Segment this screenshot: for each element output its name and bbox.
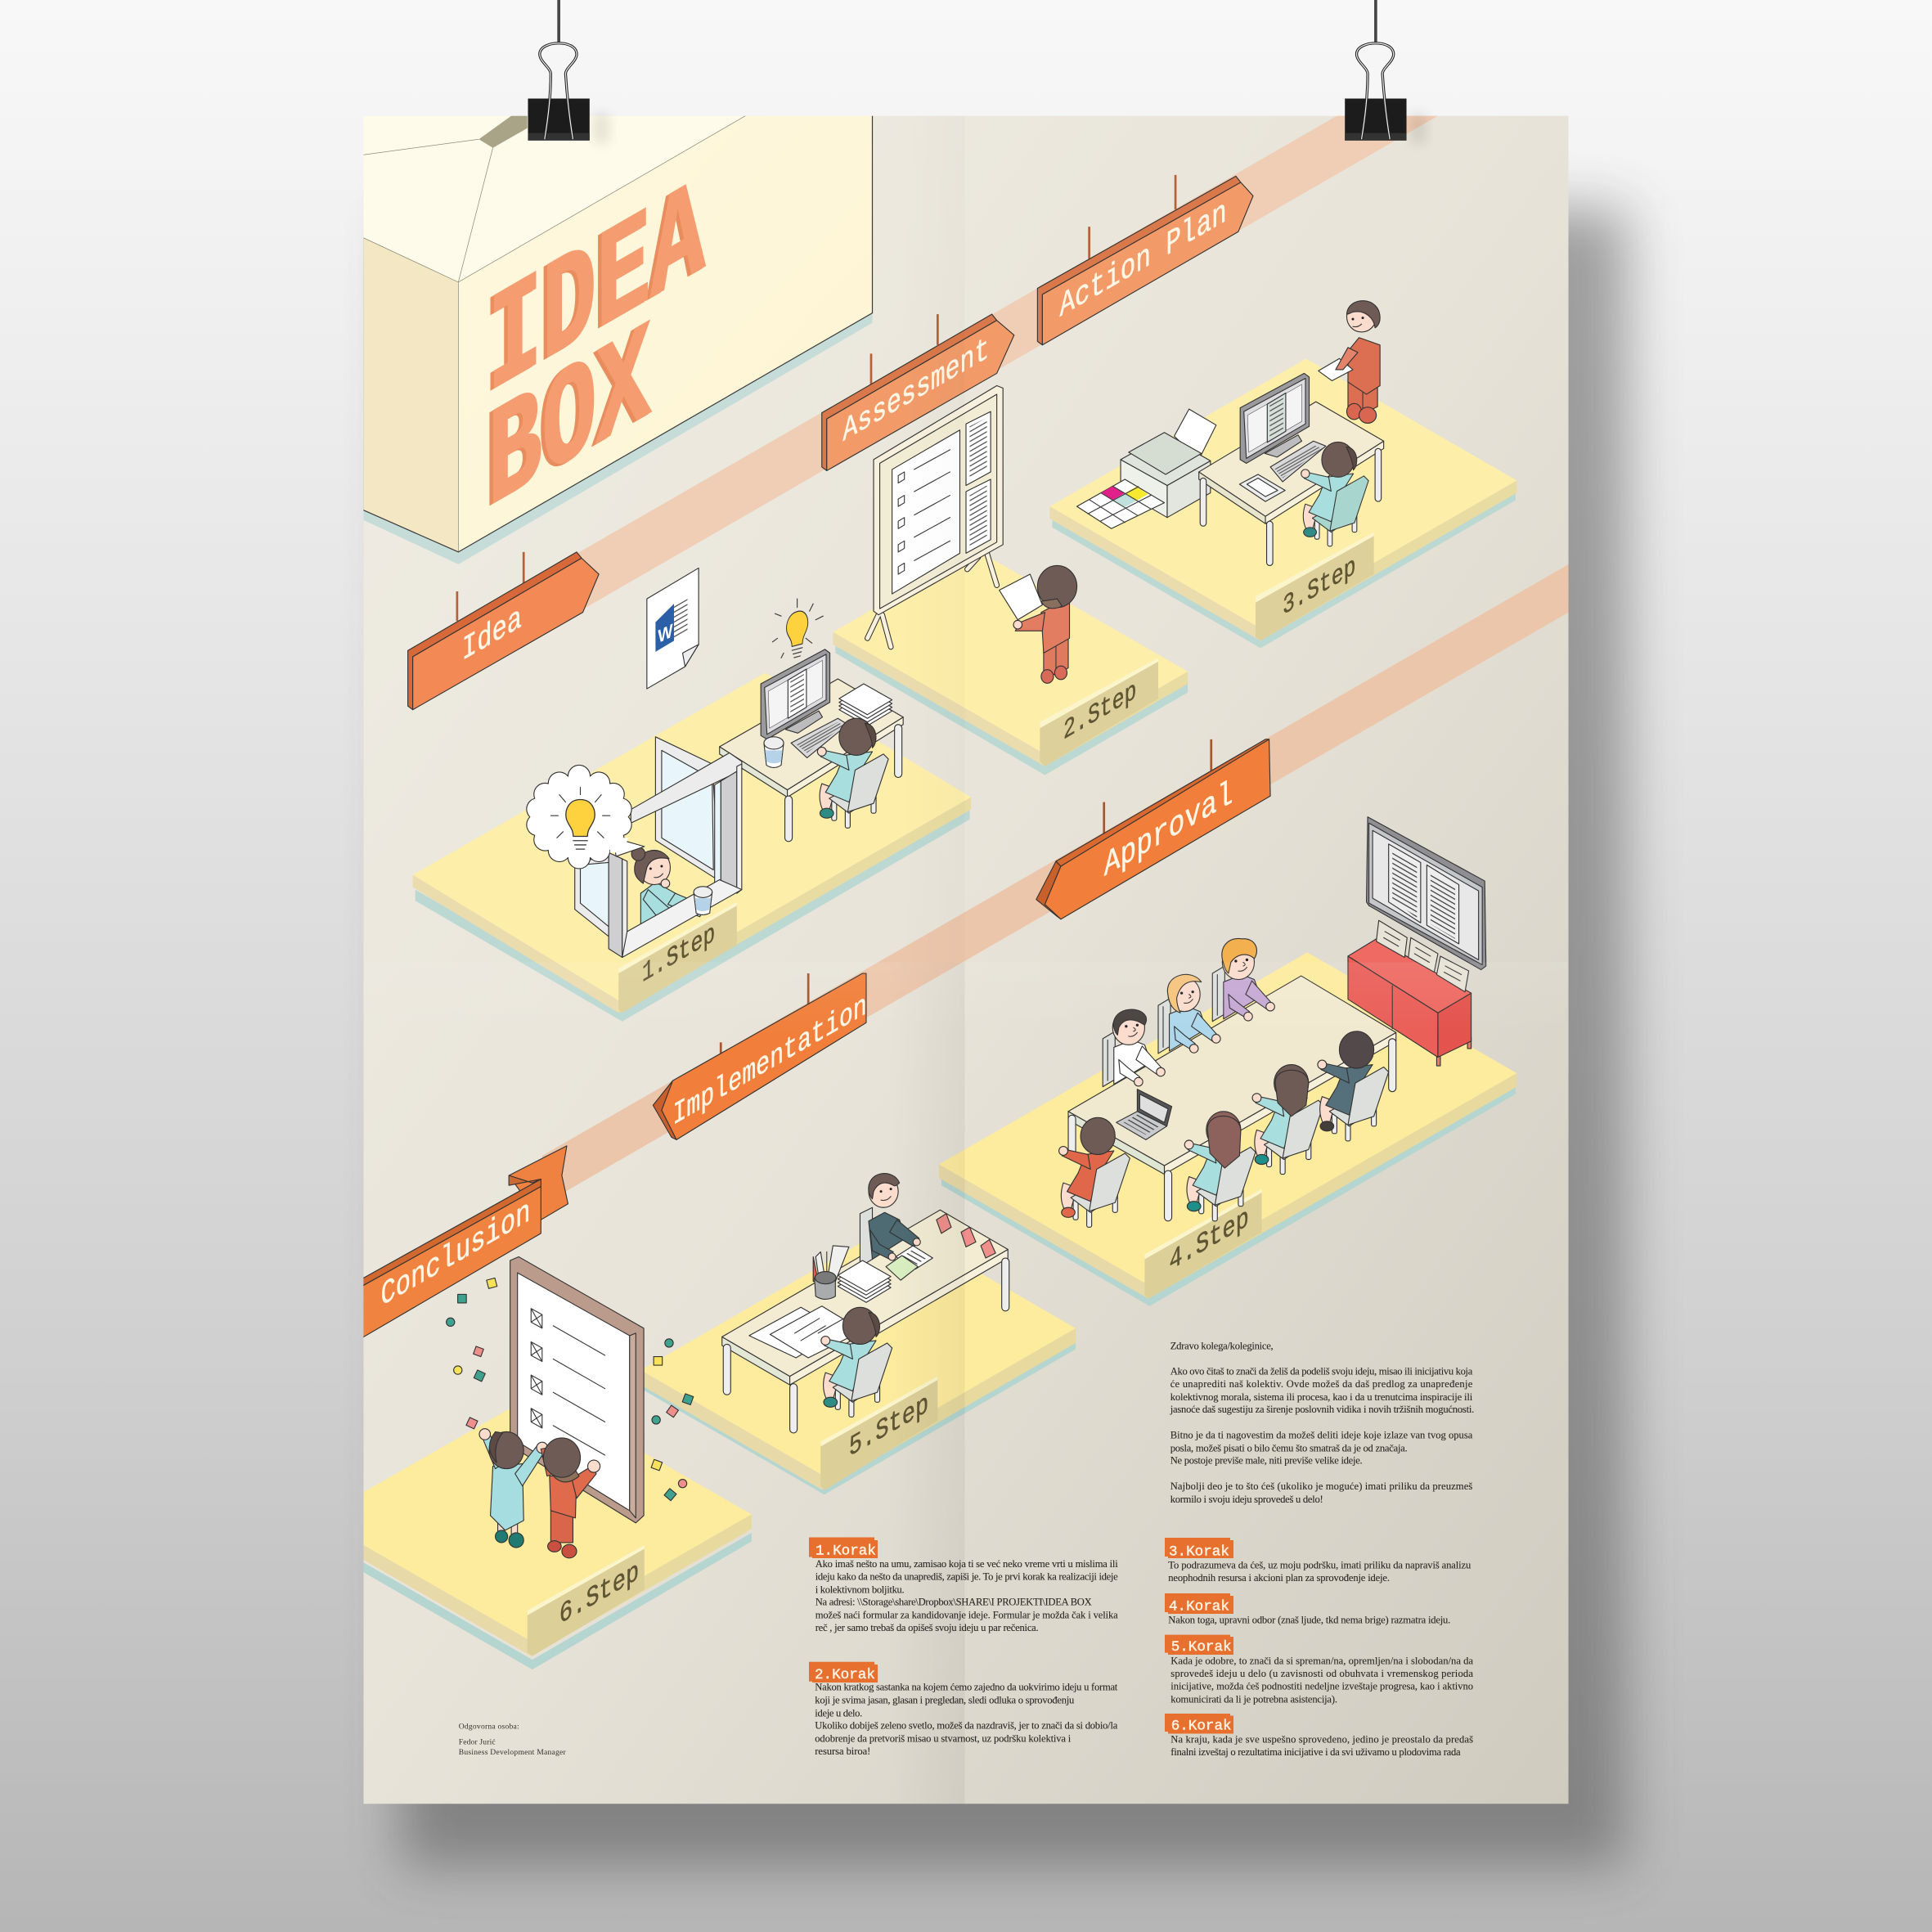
- checklist board: [510, 1257, 644, 1523]
- text block: responsible person: [459, 1722, 566, 1757]
- fold shading: vertical lower: [887, 962, 964, 1804]
- printed colour sheet: [1077, 479, 1165, 528]
- speech bubble with bulb: [527, 765, 645, 869]
- person: man in white shirt: [1103, 1009, 1165, 1087]
- step tab 5: [820, 1379, 937, 1489]
- sign: Idea: [408, 552, 599, 710]
- step label 2: 2.Step: [1063, 675, 1136, 748]
- step tab 6: [528, 1548, 645, 1656]
- text block: step 1: reč , jer samo trebaš da opišeš svoju ideju u par rečenica.: [815, 1622, 1039, 1633]
- ribbon: Conclusion: Conclusion: [380, 1193, 530, 1317]
- platform 1: [413, 672, 971, 1022]
- seated worker 1: [817, 718, 888, 828]
- text block: greeting: Najbolji deo je to što ćeš (ukoliko je moguće) imati priliku da preuzmeš: [1170, 1480, 1472, 1492]
- label: 1.Korak: 1.Korak: [815, 1543, 876, 1560]
- road band: upper: [567, 116, 1438, 618]
- tablet: [1239, 474, 1285, 501]
- man at desk: [860, 1174, 920, 1267]
- scene 5: desk: [722, 1174, 1009, 1433]
- checklist: [892, 430, 959, 594]
- text block: step 5: inicijative, možda ćeš podnostiti nedeljne izveštaje progresa, kao i aktivno: [1170, 1681, 1473, 1692]
- woman at window: [631, 847, 705, 932]
- word document: [647, 568, 699, 689]
- sign: Approval: Approval: [1104, 774, 1233, 887]
- text block: step 1: ideju kako da nešto da unaprediš, zapiši je. To je prvi korak ka realizaciji ideje: [815, 1571, 1118, 1583]
- text block: responsible person: Odgovorna osoba:: [459, 1722, 519, 1731]
- binder clip right: [1345, 0, 1426, 143]
- label: 6.Korak: 6.Korak: [1171, 1719, 1232, 1735]
- platform 6: [363, 1392, 752, 1669]
- front frame: [631, 753, 742, 823]
- window: [575, 737, 742, 957]
- side notes: [966, 411, 991, 486]
- person: blonde woman: [1158, 974, 1220, 1054]
- text block: greeting: Bitno je da ti nagovestim da možeš deliti ideje koje izlaze van tvog opusa: [1170, 1430, 1473, 1441]
- cabinet frames: [1377, 920, 1407, 957]
- legs 1: [785, 796, 793, 842]
- text block: greeting: kolektivnog morala, sistema ili procesa, kao i da u trenutcima inspiracije ili: [1170, 1391, 1473, 1403]
- step label 5: 5.Step: [849, 1387, 928, 1465]
- woman at desk 5: [821, 1307, 892, 1417]
- paper stack: [839, 684, 892, 726]
- tent cards: [937, 1214, 995, 1258]
- keyboard 3: [1270, 441, 1326, 482]
- red cabinet: [1348, 920, 1471, 1066]
- text block: step 2: Nakon kratkog sastanka na kojem ćemo zajedno da uokvirimo ideju u format: [815, 1682, 1118, 1693]
- step label 4: 4.Step: [1170, 1202, 1249, 1279]
- text block: step 1: možeš naći formular za kandidovanje ideje. Formular je možda čak i velika: [815, 1609, 1118, 1620]
- fold shading: horizontal: [363, 962, 1569, 1036]
- word document: W: [658, 619, 673, 647]
- title: IDEA BOX: IDEA: [488, 150, 705, 432]
- text block: greeting: Ne postoje previše male, niti previše velike ideje.: [1170, 1455, 1363, 1467]
- cup on sill: [694, 887, 712, 914]
- text block: greeting: će unaprediti naš kolektiv. Ovde možeš da daš predlog za unapređenje: [1170, 1378, 1473, 1390]
- sign: Action Plan: [1037, 175, 1253, 345]
- binder clip left: [528, 0, 609, 143]
- person back: long hair: [1184, 1112, 1256, 1221]
- text block: step 2: [809, 1662, 1118, 1757]
- coffee cup: [764, 737, 784, 767]
- title: IDEA BOX: IDEA: [484, 152, 701, 434]
- text block: step 3: [1165, 1538, 1471, 1584]
- left leaf: [575, 856, 609, 937]
- step tab 3: [1256, 535, 1374, 640]
- ribbon: Conclusion: [357, 1146, 568, 1341]
- back leaf: [655, 737, 720, 881]
- sign: Idea: Idea: [462, 599, 522, 671]
- text block: greeting: jasnoće daš sugestiju za širenje poslovnih vidika i novih tržišnih mogućnosti.: [1170, 1404, 1474, 1415]
- text block: step 3: To podrazumeva da ćeš, uz moju podršku, imati priliku da napraviš analizu: [1168, 1559, 1471, 1570]
- person: curly hair: [1212, 938, 1274, 1022]
- sign: Approval: [1036, 739, 1270, 919]
- sign: Implementation: Implementation: [672, 987, 867, 1134]
- scene 2: planning board: [867, 385, 1077, 683]
- label: 2.Korak: [809, 1662, 878, 1683]
- easel legs: [867, 553, 997, 647]
- text block: greeting: [1170, 1340, 1474, 1505]
- label: 6.Korak: [1165, 1714, 1233, 1735]
- text block: step 3: neophodnih resursa i akcioni plan za sprovođenje ideje.: [1168, 1572, 1390, 1584]
- board frame: [874, 385, 1003, 615]
- text block: greeting: kormilo i svoju ideju sprovedeš u delo!: [1170, 1494, 1323, 1505]
- scene 1: window and desk: [527, 599, 903, 957]
- pen cup: [813, 1246, 849, 1299]
- text block: responsible person: Fedor Jurić: [459, 1737, 496, 1746]
- desk 3: [1199, 472, 1265, 523]
- seated worker 3: [1301, 442, 1368, 546]
- step tab 1: [618, 905, 737, 1013]
- person: red man: [541, 1438, 600, 1558]
- box shadow: [363, 313, 873, 564]
- poster drop shadow: [401, 209, 1626, 1867]
- text block: step 2: ideje u delo.: [815, 1707, 862, 1719]
- text block: step 2: koji je svima jasan, glasan i pregledan, sledi odluka o sprovođenju: [815, 1694, 1075, 1705]
- table: [1068, 1112, 1165, 1175]
- label: 2.Korak: 2.Korak: [815, 1667, 875, 1683]
- label: 5.Korak: [1165, 1635, 1233, 1656]
- title: IDEA BOX: [489, 184, 707, 505]
- laptop: [1117, 1090, 1172, 1139]
- platform 5: [640, 1224, 1076, 1494]
- text block: step 4: [1165, 1593, 1450, 1625]
- monitor 1: [761, 649, 830, 739]
- title: IDEA BOX: BOX: [488, 296, 651, 546]
- text block: greeting: Zdravo kolega/koleginice,: [1170, 1340, 1274, 1351]
- text block: step 1: [809, 1538, 1118, 1633]
- label: 3.Korak: 3.Korak: [1169, 1543, 1229, 1560]
- printer: [1077, 409, 1216, 528]
- person reading: [1000, 565, 1077, 683]
- poster: [357, 116, 1569, 1804]
- sign: Action Plan: Action Plan: [1059, 192, 1227, 327]
- label: 4.Korak: [1165, 1593, 1233, 1615]
- text block: responsible person: Business Development Manager: [459, 1748, 566, 1757]
- idea bulb: [772, 599, 823, 659]
- text block: step 5: [1165, 1635, 1473, 1705]
- scene 4: meeting room: [1059, 817, 1486, 1227]
- fold shading: vertical upper: [900, 116, 964, 962]
- person back: dark: [1318, 1031, 1389, 1141]
- text block: step 2: Ukoliko dobiješ zeleno svetlo, možeš da nazdraviš, jer to znači da si dobio/la: [815, 1720, 1118, 1732]
- step label 3: 3.Step: [1283, 550, 1356, 623]
- text block: step 2: odobrenje da pretvoriš misao u stvarnost, uz podršku kolektiva i: [815, 1732, 1072, 1744]
- label: 1.Korak: [809, 1538, 878, 1560]
- monitor 3: [1240, 373, 1310, 463]
- confetti: [447, 1278, 694, 1501]
- step tab 2: [1040, 660, 1158, 766]
- book and note: [886, 1246, 932, 1280]
- text block: step 4: Nakon toga, upravni odbor (znaš ljude, tkd nema brige) razmatra ideju.: [1168, 1614, 1450, 1625]
- standing man with clipboard: [1319, 301, 1380, 423]
- scene 6: finished checklist and people: [447, 1257, 694, 1558]
- person back: teal: [1252, 1065, 1323, 1175]
- person back: red: [1059, 1117, 1130, 1227]
- step label 1: 1.Step: [642, 918, 715, 991]
- documents: [749, 1307, 842, 1358]
- person: teal woman: [479, 1429, 548, 1548]
- desk 1: [720, 747, 788, 798]
- text block: step 1: Na adresi: \\Storage\share\Dropbox\SHARE\I PROJEKTI\IDEA BOX: [815, 1597, 1092, 1608]
- road band: lower: [542, 564, 1569, 1205]
- text block: step 5: sprovedeš ideju u delo (u zavisnosti od obuhvata i vremenskog perioda: [1170, 1668, 1473, 1679]
- paper stack 5: [838, 1260, 891, 1302]
- text block: step 6: [1165, 1714, 1473, 1758]
- label: 5.Korak: 5.Korak: [1171, 1639, 1232, 1656]
- text block: greeting: Ako ovo čitaš to znači da želiš da podeliš svoju ideju, misao ili inicijativu koja: [1170, 1366, 1473, 1377]
- step tab 4: [1144, 1192, 1262, 1299]
- text block: step 5: komunicirati da li je potrebna asistencija).: [1170, 1693, 1337, 1705]
- scene 3: printing desk: [1077, 301, 1384, 565]
- text block: step 2: resursa biroa!: [815, 1746, 870, 1757]
- platform 2: [833, 550, 1188, 775]
- keyboard 1: [791, 718, 847, 757]
- text block: step 1: Ako imaš nešto na umu, zamisao koja ti se već neko vreme vrti u mislima ili: [815, 1558, 1118, 1570]
- sign: Assessment: [822, 314, 1014, 470]
- text block: step 5: Kada je odobre, to znači da si spreman/na, opremljen/na i slobodan/na da: [1170, 1655, 1473, 1666]
- label: 3.Korak: [1165, 1538, 1233, 1560]
- step label 6: 6.Step: [559, 1555, 639, 1633]
- idea box: [363, 116, 873, 564]
- paper sheet: [363, 116, 1569, 1804]
- platform 4: [939, 952, 1516, 1306]
- title: IDEA BOX: BOX: [484, 299, 647, 549]
- sign: Assessment: Assessment: [842, 330, 989, 452]
- text block: step 6: finalni izveštaj o rezultatima inicijative i da svi uživamo u plodovima rada: [1170, 1746, 1461, 1758]
- wall screen: [1367, 817, 1486, 970]
- legs 3: [1200, 478, 1206, 526]
- platform 3: [1049, 358, 1516, 648]
- label: 4.Korak: 4.Korak: [1169, 1598, 1229, 1615]
- text block: step 6: Na kraju, kada je sve uspešno sprovedeno, jedino je preostalo da predaš: [1170, 1734, 1473, 1746]
- text block: step 1: i kolektivnom boljitku.: [815, 1584, 905, 1595]
- text block: greeting: posla, možeš pisati o bilo čemu što smatraš da je od značaja.: [1170, 1442, 1408, 1453]
